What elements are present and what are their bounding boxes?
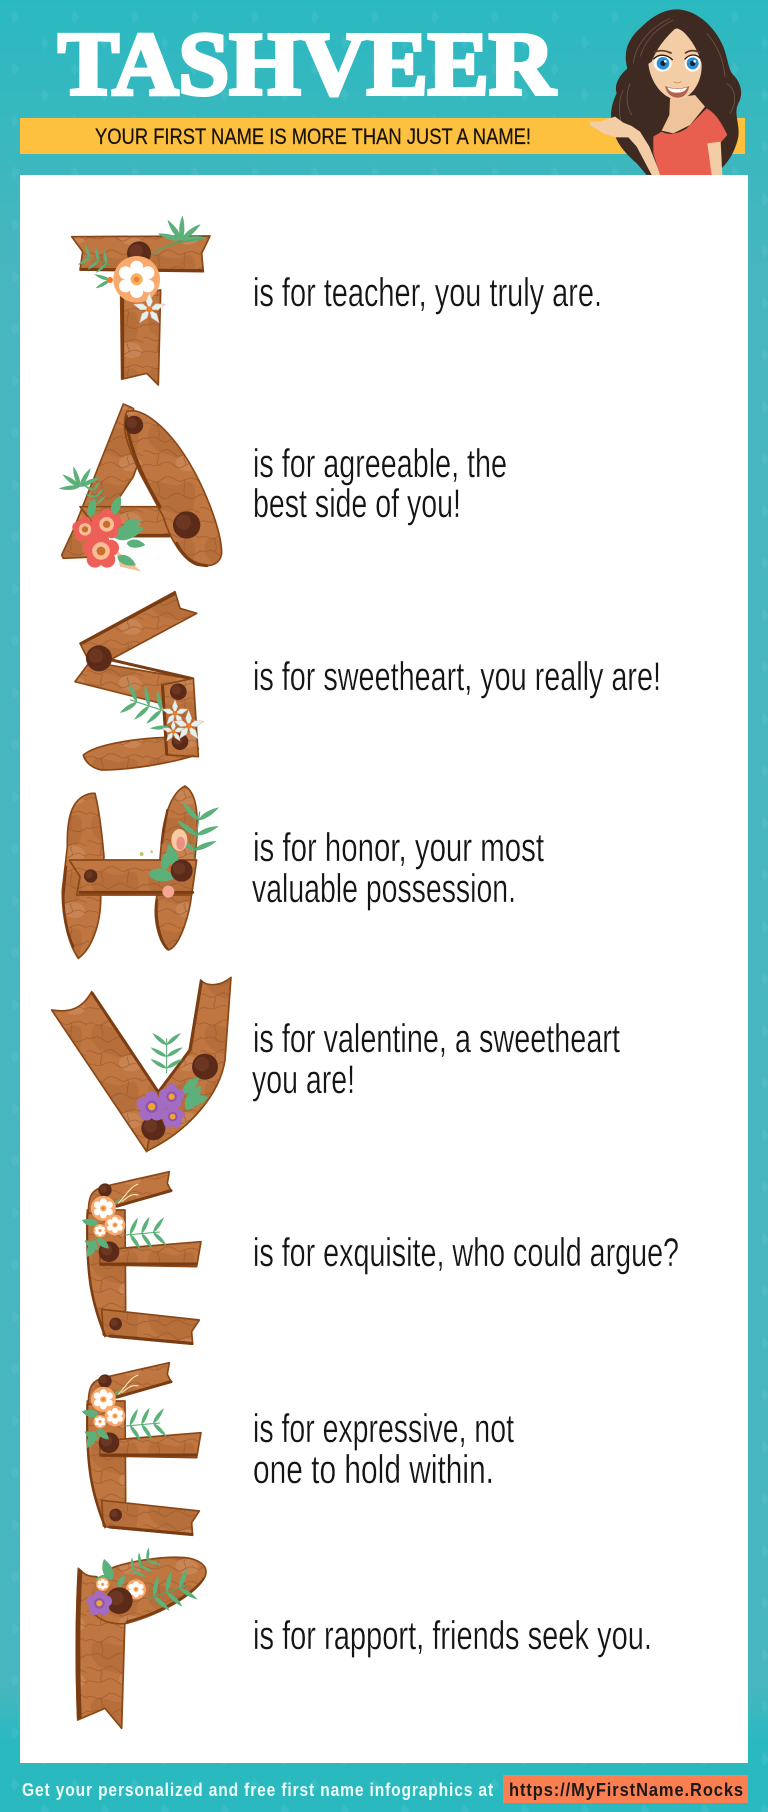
text: H bbox=[252, 826, 544, 911]
letter V bbox=[52, 977, 231, 1152]
text: V: is for valentine, a sweetheart bbox=[253, 1017, 620, 1061]
letter S bbox=[75, 592, 205, 770]
letter A bbox=[53, 404, 222, 572]
letter E bbox=[81, 1172, 201, 1344]
footer link badge: https://MyFirstName.Rocks bbox=[509, 1780, 744, 1800]
letter T bbox=[72, 215, 210, 385]
letter P bbox=[76, 1545, 206, 1728]
footer call to action: Get your personalized and free first name infographics at bbox=[22, 1780, 494, 1800]
letter H bbox=[62, 786, 223, 958]
footer link badge bbox=[503, 1775, 748, 1803]
text: E second: one to hold within. bbox=[253, 1448, 494, 1492]
text: A: best side of you! bbox=[253, 482, 461, 526]
text: A: is for agreeable, the bbox=[253, 442, 507, 486]
title: TASHVEER bbox=[58, 15, 556, 114]
character: woman presenting bbox=[590, 9, 741, 175]
text: A bbox=[253, 442, 507, 526]
letter E second bbox=[81, 1363, 201, 1535]
text: E second: is for expressive, not bbox=[253, 1407, 514, 1451]
text: H: valuable possession. bbox=[252, 867, 516, 911]
text: T: is for teacher, you truly are. bbox=[253, 271, 602, 315]
text: V: you are! bbox=[252, 1058, 355, 1102]
text: V bbox=[252, 1017, 620, 1102]
text: H: is for honor, your most bbox=[253, 826, 544, 870]
subtitle banner: YOUR FIRST NAME IS MORE THAN JUST A NAME! bbox=[95, 124, 531, 149]
text: E second bbox=[253, 1407, 514, 1492]
subtitle banner bbox=[20, 118, 745, 154]
